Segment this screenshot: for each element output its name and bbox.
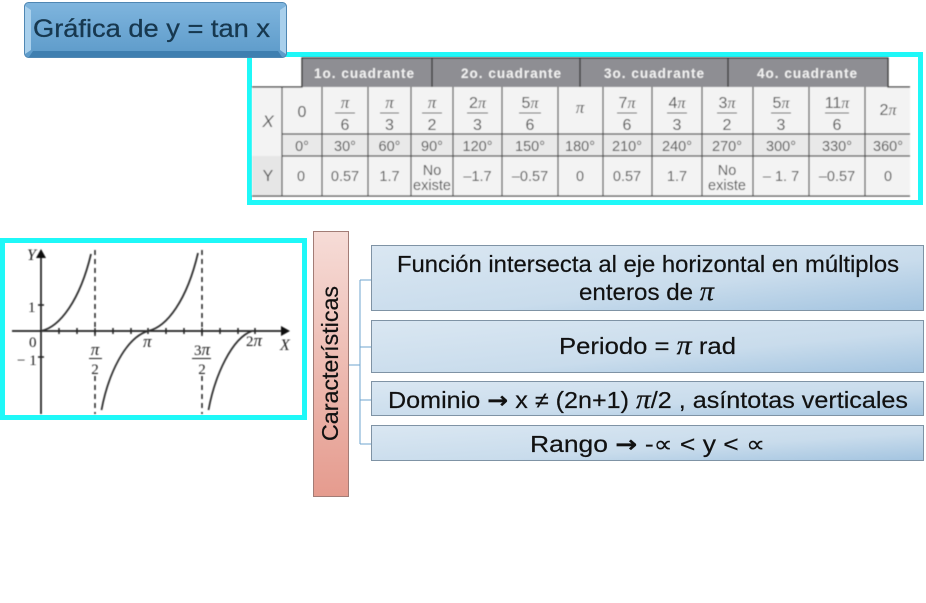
- asymptotes: [95, 250, 202, 414]
- row X: radians: π: [576, 98, 585, 117]
- row Y: tangent values: 0: [576, 169, 584, 185]
- row Y: tangent values: 0.57: [613, 169, 641, 185]
- axis labels: [17, 247, 291, 378]
- title box: [24, 2, 286, 58]
- axis labels: X: [279, 337, 291, 354]
- row X: radians: π: [341, 93, 350, 112]
- quadrant header: 4o. cuadrante: [757, 66, 857, 81]
- row Y: tangent values: –0.57: [819, 169, 855, 185]
- panel: Características label: [314, 232, 348, 496]
- row Y: tangent values: existe: [413, 178, 451, 194]
- row: degrees: 120°: [462, 139, 492, 155]
- row X: radians: X: [261, 112, 274, 131]
- row X: radians: 3: [777, 117, 786, 134]
- row X: radians: 3: [385, 117, 394, 134]
- row Y: tangent values: – 1. 7: [763, 169, 799, 185]
- row X: radians: 3: [673, 117, 682, 134]
- row X: radians: π: [428, 93, 437, 112]
- row Y: tangent values: –0.57: [512, 169, 548, 185]
- row X: radians: 2π: [469, 95, 487, 112]
- graph plot: [12, 247, 291, 414]
- axis labels: π: [91, 340, 100, 359]
- panel: Características label: Características: [317, 286, 343, 441]
- axis labels: 2: [198, 362, 206, 378]
- row Y: tangent values: No: [423, 163, 441, 179]
- axis labels: 2: [91, 362, 99, 378]
- row X: radians: π: [385, 93, 394, 112]
- row X: radians: 2: [723, 117, 732, 134]
- axes: [12, 249, 290, 414]
- row X: radians: 3π: [719, 95, 736, 112]
- row X: radians: 0: [298, 104, 307, 121]
- graph frame: [2, 240, 304, 418]
- row X: radians: 2: [428, 117, 437, 134]
- panel: tangent graph: [2, 240, 304, 418]
- box: intersecciones: Función intersecta al eje horizontal en múltiplos: [397, 251, 899, 277]
- quadrant header: 3o. cuadrante: [604, 66, 704, 81]
- axis labels: 3π: [194, 340, 210, 359]
- table content: [252, 58, 910, 196]
- row X: radians: 4π: [669, 95, 686, 112]
- row X: radians: 6: [341, 117, 350, 134]
- axis labels: π: [143, 332, 152, 351]
- row X: radians: 7π: [619, 95, 636, 112]
- row X: radians: 3: [473, 117, 482, 134]
- box: intersecciones: enteros de π: [579, 276, 716, 306]
- quadrant header: 2o. cuadrante: [461, 66, 561, 81]
- row Y: tangent values: 1.7: [379, 169, 400, 185]
- row: degrees: 180°: [565, 139, 595, 155]
- row: degrees: 300°: [766, 139, 796, 155]
- quadrant header: [252, 58, 910, 87]
- row Y: tangent values: [263, 163, 892, 194]
- panel: values table: [250, 54, 920, 202]
- row X: radians: 6: [623, 117, 632, 134]
- row: degrees: 60°: [379, 139, 400, 155]
- connector lines: [349, 280, 371, 444]
- row: degrees: 240°: [662, 139, 692, 155]
- table body background: [252, 87, 910, 196]
- row Y: tangent values: existe: [708, 178, 746, 194]
- row: degrees: 30°: [334, 139, 356, 155]
- degrees row background: [282, 134, 910, 156]
- row X: radians: 6: [526, 117, 535, 134]
- box: dominio: Dominio → x ≠ (2n+1) π/2 , asíntotas verticales: [388, 384, 908, 414]
- row: degrees: 0°: [295, 139, 309, 155]
- row: degrees: 270°: [712, 139, 742, 155]
- row: degrees: 360°: [873, 139, 903, 155]
- box: intersecciones: [372, 246, 924, 310]
- row Y: tangent values: Y: [263, 168, 274, 185]
- label column background: [252, 156, 282, 196]
- row X: radians: 2π: [880, 102, 897, 119]
- row Y: tangent values: 0: [297, 169, 305, 185]
- axis labels: 0: [29, 335, 36, 351]
- box: rango: [372, 426, 924, 460]
- box: periodo: [372, 320, 924, 372]
- tangent curves: [41, 253, 252, 410]
- title box: Gráfica de y = tan x: [33, 15, 271, 43]
- row X: radians: 6: [833, 117, 842, 134]
- row: degrees: 150°: [515, 139, 545, 155]
- row X: radians: 5π: [773, 95, 790, 112]
- row Y: tangent values: 0.57: [331, 169, 359, 185]
- axis labels: 2π: [246, 331, 262, 350]
- box: periodo: Periodo = π rad: [559, 330, 736, 360]
- axis labels: 1: [28, 300, 36, 316]
- row Y: tangent values: 0: [884, 169, 892, 185]
- row X: radians: [261, 93, 897, 134]
- row Y: tangent values: No: [718, 163, 736, 179]
- quadrant header: 1o. cuadrante: [314, 66, 414, 81]
- row: degrees: 210°: [612, 139, 642, 155]
- box: rango: Rango → -∝ < y < ∝: [530, 431, 765, 458]
- row: degrees: 330°: [822, 139, 852, 155]
- table frame: [250, 54, 920, 202]
- row: degrees: [295, 139, 903, 155]
- axis labels: − 1: [17, 353, 37, 369]
- row X: radians: 11π: [825, 95, 850, 112]
- row X: radians: 5π: [522, 95, 539, 112]
- row: degrees: 90°: [421, 139, 443, 155]
- axis labels: Y: [27, 247, 38, 264]
- row Y: tangent values: –1.7: [463, 169, 492, 185]
- row Y: tangent values: 1.7: [667, 169, 687, 185]
